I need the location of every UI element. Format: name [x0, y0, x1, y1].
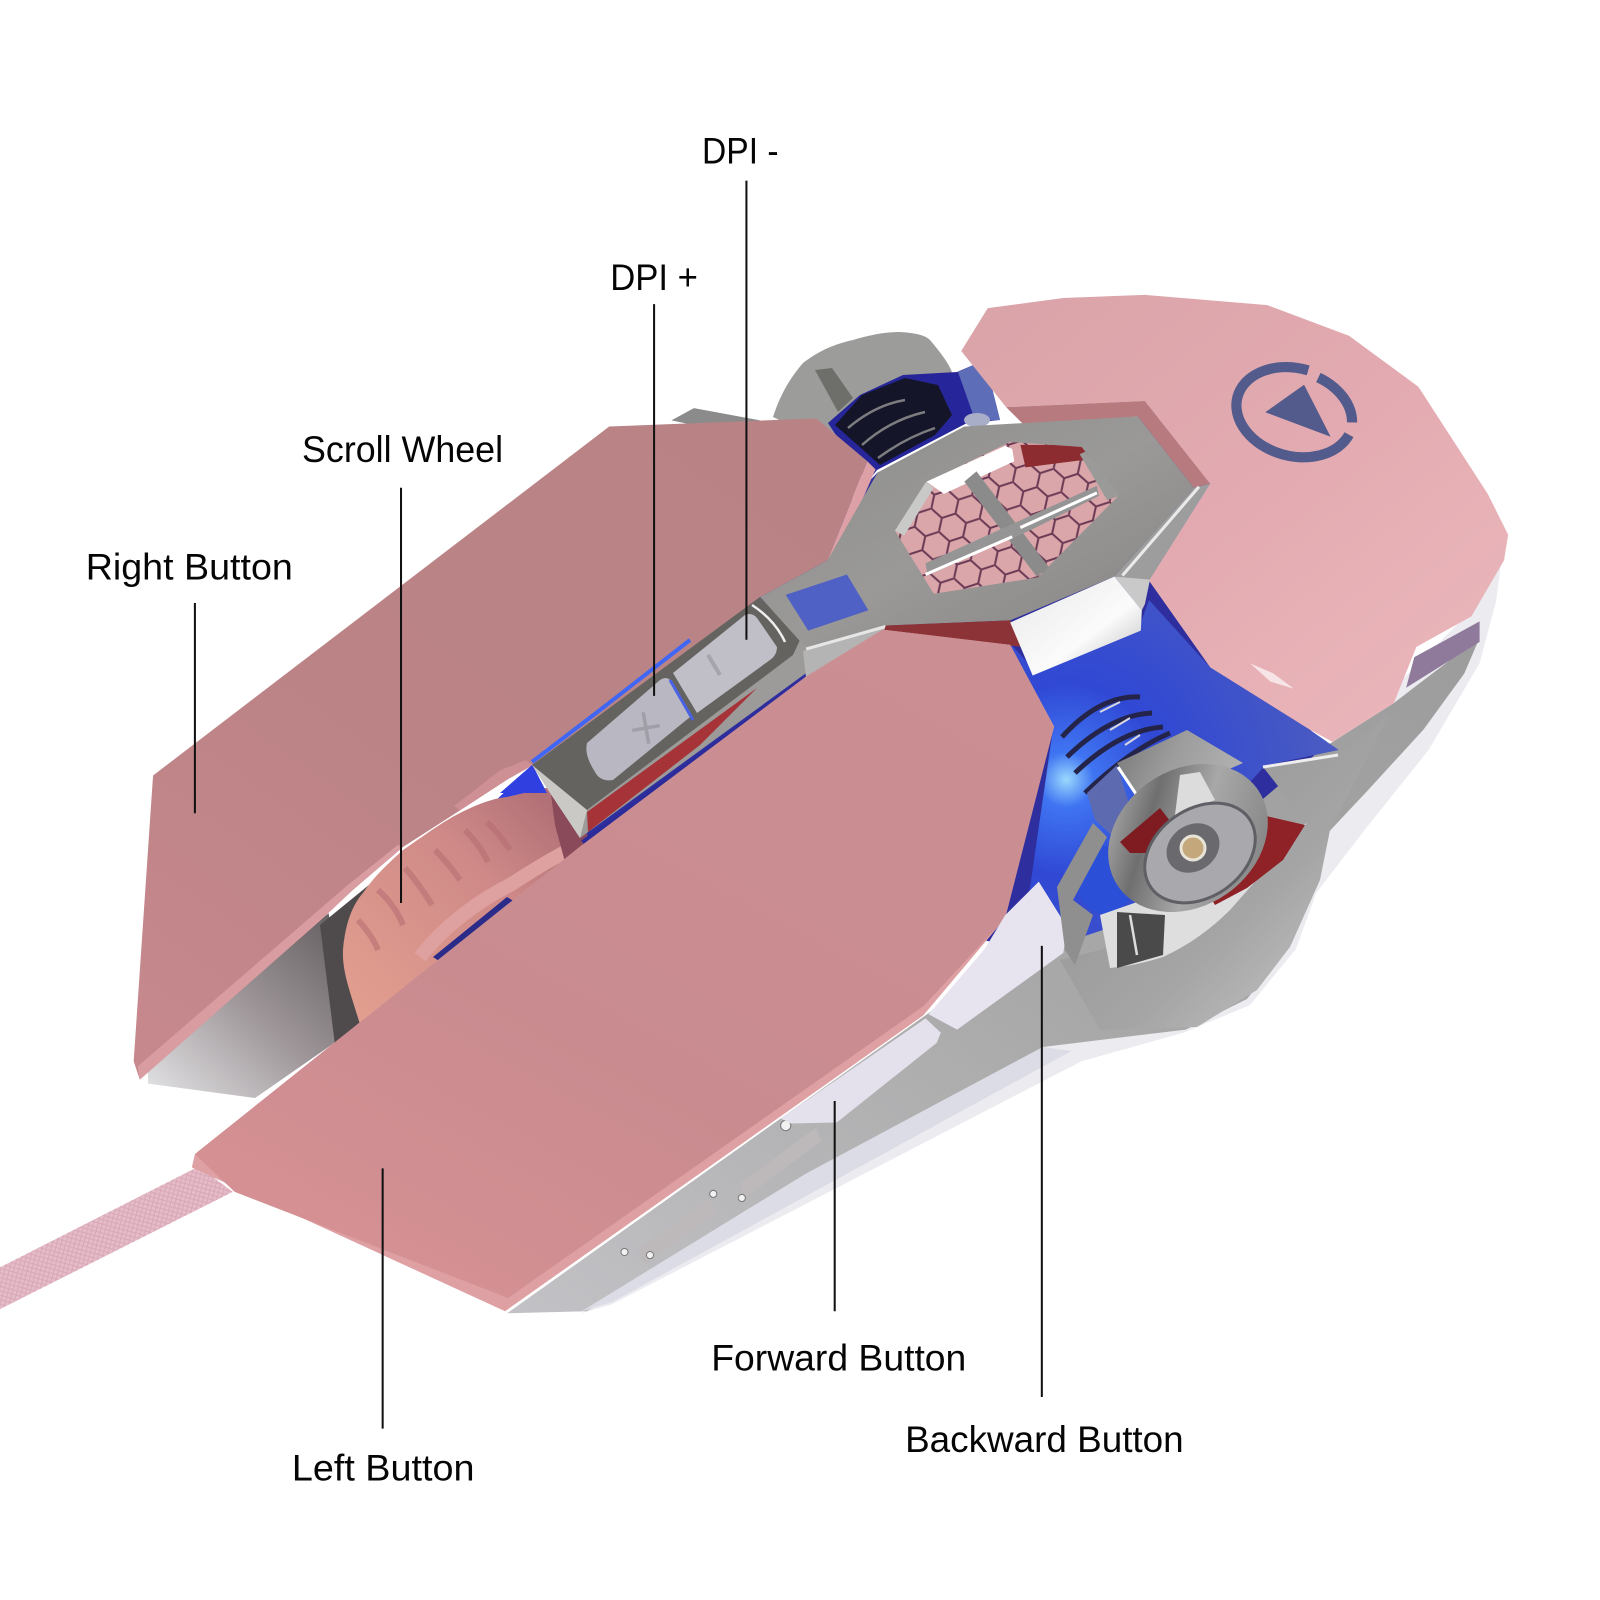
label: Scroll Wheel: Scroll Wheel — [302, 428, 503, 470]
blue under disk — [1077, 846, 1133, 914]
front spring — [1062, 697, 1170, 793]
brass screw — [1181, 836, 1205, 860]
hub cylinder — [1117, 730, 1243, 807]
dark red seam — [883, 620, 1024, 647]
scroll wheel — [320, 787, 592, 1045]
rear thumb piece — [671, 408, 760, 434]
silver hex plate — [760, 416, 1210, 679]
vent window with honeycomb — [895, 442, 1122, 594]
window cross bars — [926, 471, 1099, 577]
chrome block — [1010, 577, 1150, 676]
label: DPI plus: DPI + — [610, 256, 698, 298]
label: Backward Button: Backward Button — [905, 1418, 1184, 1460]
right rear reflection — [1406, 621, 1480, 688]
hub disk — [1079, 734, 1297, 942]
blue triangle by wheel — [490, 765, 551, 806]
chrome bowl — [1100, 823, 1307, 968]
shell recess bevel — [1006, 401, 1210, 488]
right red reflection — [1200, 815, 1305, 905]
logo: play in segmented circle — [1236, 367, 1352, 457]
DPI minus button — [673, 614, 777, 713]
braided cable — [0, 1166, 233, 1309]
mouse illustration — [0, 295, 1508, 1313]
underside lavender strip — [582, 1047, 1071, 1311]
left chrome arm — [1057, 823, 1107, 965]
side vent details — [621, 1120, 821, 1265]
white highlight bar — [927, 446, 1014, 494]
inner blue backing — [533, 416, 1327, 949]
label: DPI minus: DPI - — [702, 129, 779, 171]
forward side button — [781, 1018, 941, 1123]
hub silver housing — [1060, 713, 1390, 1030]
right mouse button — [134, 418, 876, 1080]
label: Right Button: Right Button — [86, 546, 293, 588]
DPI plus button — [586, 678, 690, 780]
front blue glow — [1005, 600, 1339, 944]
white outer shell rim — [582, 556, 1502, 1313]
silver chassis — [507, 638, 1480, 1313]
top shell — [961, 295, 1508, 742]
wedge under right button — [148, 913, 352, 1098]
lower silver lip — [803, 626, 888, 679]
label: Left Button: Left Button — [292, 1447, 474, 1489]
chrome wheel hub — [1057, 697, 1390, 1030]
blue LED square — [786, 574, 868, 631]
label: Forward Button: Forward Button — [711, 1336, 966, 1378]
glossy highlight — [1250, 663, 1294, 689]
left mouse button — [192, 630, 1054, 1311]
rear chrome cylinder and spring — [773, 332, 1000, 483]
backward side button — [929, 882, 1067, 1030]
DPI button strip — [500, 597, 820, 843]
